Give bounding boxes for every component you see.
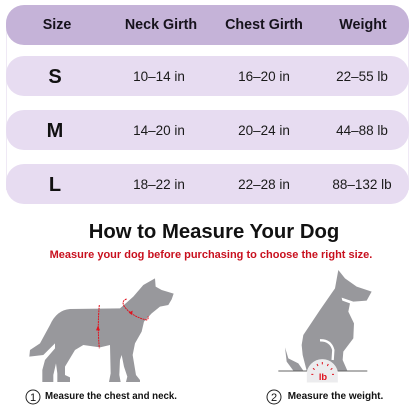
table row: S [6, 56, 409, 96]
step 1 number: 1 [30, 392, 36, 404]
size S: S [48, 66, 62, 88]
neck L: 18–22 in [133, 177, 185, 192]
neck S: 10–14 in [133, 69, 185, 84]
header: Weight: Weight [339, 17, 387, 33]
weight S: 22–55 lb [336, 69, 388, 84]
header: Neck Girth: Neck Girth [125, 17, 197, 33]
step 1 caption: Measure the chest and neck. [45, 391, 177, 402]
step 2 caption: Measure the weight. [288, 391, 383, 402]
scale label: lb [319, 372, 327, 382]
weight L: 88–132 lb [332, 177, 392, 192]
header: Size: Size [43, 17, 71, 33]
size M: M [47, 120, 63, 142]
table outline [6, 20, 409, 190]
step 1 number [26, 390, 40, 404]
step 2 number [267, 390, 281, 404]
chest S: 16–20 in [238, 69, 290, 84]
size L: L [49, 174, 61, 196]
table row: L [6, 164, 409, 204]
neck M: 14–20 in [133, 123, 185, 138]
table header row [6, 5, 409, 45]
icon: sitting dog on scale [278, 270, 372, 383]
title: How to Measure Your Dog [89, 221, 339, 243]
table row: M [6, 110, 409, 150]
chest L: 22–28 in [238, 177, 290, 192]
step 2 number: 2 [271, 392, 277, 404]
weight M: 44–88 lb [336, 123, 388, 138]
icon: standing dog with measuring lines [29, 278, 174, 382]
subtitle: Measure your dog before purchasing to choose the right size. [50, 249, 372, 261]
header: Chest Girth: Chest Girth [225, 17, 303, 33]
chest M: 20–24 in [238, 123, 290, 138]
